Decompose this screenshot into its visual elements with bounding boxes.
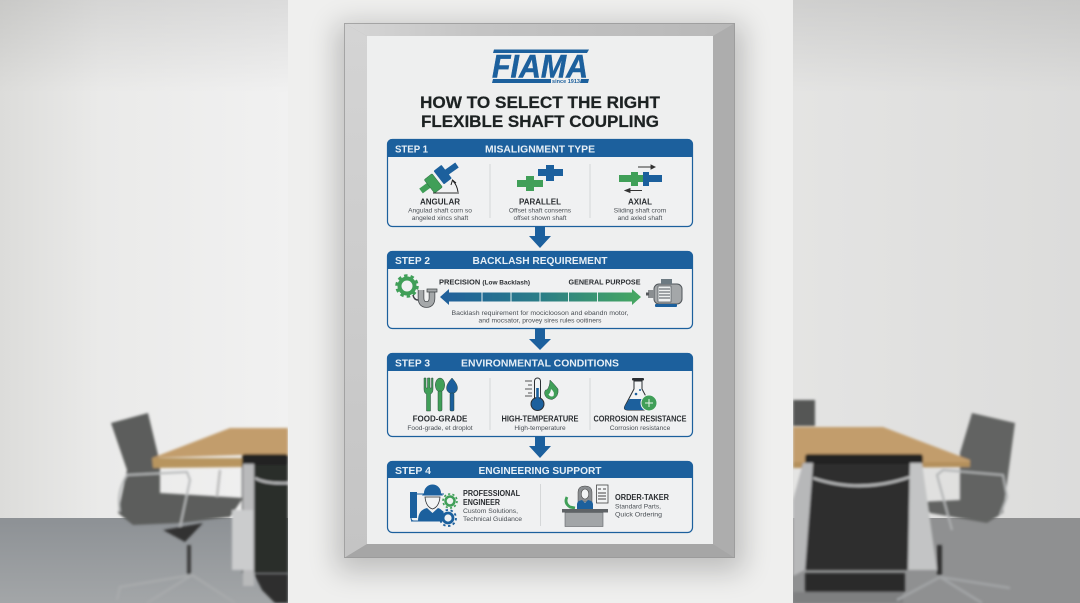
FIAMA logo: since 1913 [552,79,580,85]
title: FLEXIBLE SHAFT COUPLING [421,112,659,131]
icon: order-taker at desk [562,485,608,526]
panel: step 4 engineering support: STEP 4 [395,465,431,477]
text: order-taker: Quick Ordering [615,512,662,518]
label: angular [408,198,472,222]
label: high-temperature [502,414,579,432]
label: parallel [509,198,572,222]
label: angular: angeled xincs shaft [412,215,468,222]
label: parallel: Offset shaft conserns [509,208,572,214]
label: precision and general purpose: GENERAL PURPOSE [568,278,640,286]
label: corrosion resistance: CORROSION RESISTANCE [594,414,687,424]
panel: step 2 backlash requirement [387,251,693,328]
label: axial [614,198,667,222]
panel: step 4 engineering support [387,461,693,532]
label: angular: ANGULAR [420,198,460,206]
panel: step 3 environmental conditions: ENVIRONMENTAL CONDITIONS [461,358,619,370]
label: precision and general purpose [439,278,640,286]
label: food-grade [407,414,473,432]
text: professional engineer: Custom Solutions, [463,508,518,515]
icon: thermometer and flame [525,378,558,410]
icon: electric motor [646,279,682,307]
panel: step 1 misalignment type [387,139,693,226]
right office background [793,0,1080,603]
label: parallel: PARALLEL [519,198,561,206]
arrow: step 3 to step 4 [529,436,551,458]
panel: step 1 misalignment type: STEP 1 [395,144,428,156]
text: backlash description [452,310,629,324]
label: high-temperature: High-temperature [514,425,566,432]
text: order-taker: Standard Parts, [615,504,661,510]
panel: step 4 engineering support: ENGINEERING SUPPORT [478,465,602,477]
label: axial: and axled shaft [618,215,663,222]
label: axial: AXIAL [628,198,652,206]
text: order-taker: ORDER-TAKER [615,493,669,502]
panel: step 3 environmental conditions: STEP 3 [395,358,430,370]
poster sheet [367,36,713,544]
FIAMA logo: FIAMA [492,48,588,84]
icon: food-grade utensils [424,378,458,411]
panel: step 2 backlash requirement: BACKLASH REQUIREMENT [472,255,608,267]
text: professional engineer: Technical Guidance [463,516,522,523]
central wall [288,0,793,603]
label: precision and general purpose: PRECISION (Low Backlash) [439,278,530,286]
panel: step 1 misalignment type: MISALIGNMENT TYPE [485,144,595,156]
text: professional engineer: PROFESSIONAL [463,489,520,498]
label: corrosion resistance [594,414,687,432]
label: axial: Sliding shaft crom [614,208,667,214]
arrow: step 1 to step 2 [529,226,551,248]
label: high-temperature: HIGH-TEMPERATURE [502,414,579,424]
chart: backlash gradient arrow [440,289,641,305]
text: order-taker [615,493,669,518]
label: food-grade: Food-grade, et droplot [407,425,473,432]
poster frame [336,23,744,572]
icon: professional engineer [410,484,457,526]
icon: flask and corrosion badge [624,378,657,411]
label: parallel: offset shown shaft [513,215,567,222]
title [420,93,661,131]
arrow: step 2 to step 3 [529,329,551,350]
title: HOW TO SELECT THE RIGHT [420,93,661,112]
left office background [0,0,288,603]
label: food-grade: FOOD-GRADE [413,414,468,424]
label: corrosion resistance: Corrosion resistance [610,425,671,432]
text: backlash description: and mocsator, provey sires rules ooitiners [478,318,602,324]
text: professional engineer: ENGINEER [463,498,500,507]
panel: step 3 environmental conditions [387,353,693,436]
text: professional engineer [463,489,522,523]
label: angular: Angulad shaft corn so [408,208,472,214]
icon: parallel misalignment [517,165,563,191]
icon: gear and coupling [396,276,437,304]
panel: step 2 backlash requirement: STEP 2 [395,255,430,267]
text: backlash description: Backlash requirement for mociclooson and ebandn motor, [452,310,629,317]
icon: axial misalignment [619,165,662,192]
icon: angular misalignment [421,165,459,193]
